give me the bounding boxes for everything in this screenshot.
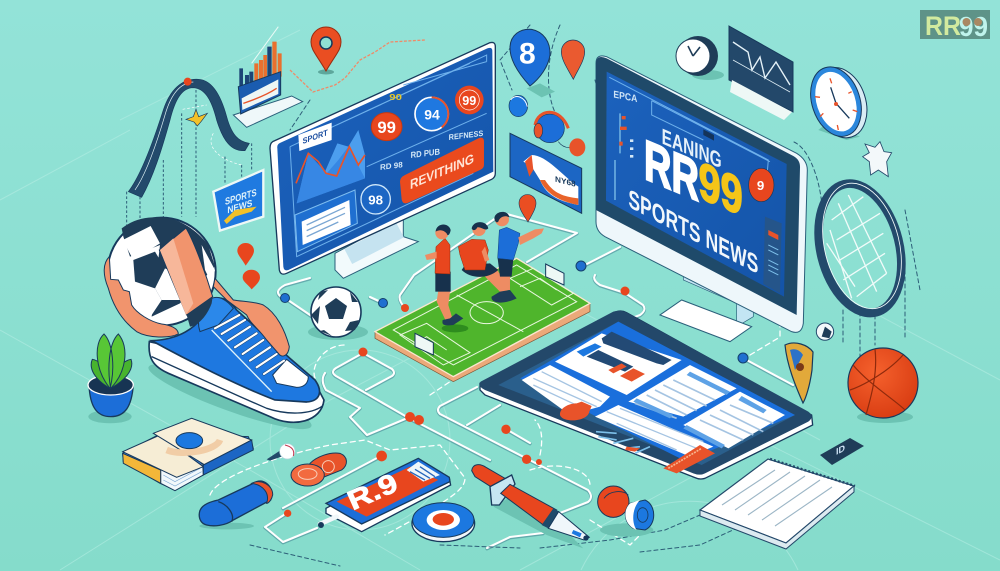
icon: small pins <box>237 243 260 289</box>
line chart dashed <box>290 40 425 92</box>
icon: star outline <box>863 142 892 177</box>
device <box>820 438 864 465</box>
pen and weights <box>472 465 654 548</box>
sign panel: SPORTS <box>225 188 257 208</box>
icon: star <box>186 109 207 126</box>
sport label: SPORT <box>303 127 328 146</box>
icon: soccer ball with leg and hands, sneaker <box>88 217 324 439</box>
sign panel <box>213 170 263 231</box>
sneaker sole <box>149 342 324 422</box>
icon: badge 8: 8 <box>519 37 536 70</box>
notepad <box>700 459 855 549</box>
laptop bar chart <box>233 27 303 127</box>
leg <box>159 228 213 315</box>
icon: headset <box>534 112 585 156</box>
small labels: 90 <box>389 93 403 102</box>
player right <box>494 212 544 290</box>
logo <box>920 10 990 42</box>
small labels <box>380 93 484 172</box>
icon: dots <box>284 425 542 517</box>
logo: 99 <box>959 11 988 42</box>
icon: small soccer ball <box>308 287 368 340</box>
sign panel: NEWS <box>227 198 252 216</box>
hands <box>104 257 178 337</box>
pitch and players <box>375 212 590 382</box>
area chart <box>296 130 365 203</box>
top left ribbon, star, laptop and sign <box>127 20 303 231</box>
network node dots <box>280 261 748 425</box>
score badge 99: 99 <box>377 118 396 137</box>
badge 9: 9 <box>757 178 764 193</box>
chart panel <box>729 26 793 120</box>
logo: RR <box>925 11 961 41</box>
icons between monitors <box>509 29 585 213</box>
score badge 99 small <box>455 86 484 114</box>
score badge 94 <box>415 97 448 131</box>
icon: coins <box>291 453 346 486</box>
book <box>123 418 253 491</box>
text card <box>295 190 357 252</box>
icon: goals <box>415 333 433 355</box>
monitor: right <box>596 56 807 342</box>
icon: capsule marker <box>199 481 273 529</box>
icon: phone R9: R.9 <box>342 467 402 516</box>
headline: 99 <box>699 149 743 227</box>
badge 98 <box>361 185 390 214</box>
monitor: left <box>270 42 495 278</box>
right side icons <box>802 60 914 340</box>
photo card <box>510 133 582 213</box>
icon: phone R9 <box>318 458 451 532</box>
photo card: NY68 <box>555 175 576 189</box>
small labels: RD 98 <box>380 160 403 172</box>
sock <box>187 297 213 327</box>
badge 98: 98 <box>368 193 383 208</box>
icon: tennis racket <box>806 175 914 322</box>
score badge 99 small: 99 <box>462 94 476 108</box>
icon: map pin <box>311 27 341 74</box>
icon: whistle <box>267 444 295 461</box>
device: ID <box>836 443 845 458</box>
headline: RR <box>644 127 699 214</box>
tablet <box>479 311 813 479</box>
score badge 94: 94 <box>424 106 440 122</box>
icon: balloon <box>509 95 528 117</box>
icon: weights <box>598 486 654 537</box>
red button: REVITHING <box>410 150 474 192</box>
player left <box>425 225 468 332</box>
icon: pen <box>472 465 589 541</box>
small labels: REFNESS <box>449 129 484 142</box>
icon: pin <box>561 40 585 79</box>
score badge 99 <box>371 113 402 141</box>
sport label <box>298 123 332 151</box>
badge 9 <box>749 168 774 202</box>
icon: target disc <box>412 503 475 542</box>
sneaker upper <box>152 298 320 402</box>
icon: shield <box>785 343 813 403</box>
shadow <box>527 83 555 97</box>
red button <box>400 138 484 203</box>
connector paths <box>210 25 920 566</box>
icon: basketball <box>848 348 918 423</box>
headline <box>628 123 758 280</box>
player middle <box>458 222 517 303</box>
laces <box>215 315 284 374</box>
icon: badge 8 <box>510 29 550 86</box>
icon: small ball right <box>816 323 834 340</box>
headline: SPORTS NEWS <box>628 183 758 280</box>
icon: wall clock small <box>676 36 724 80</box>
tablet button <box>560 402 592 420</box>
small label EPCA: EPCA <box>613 89 638 105</box>
icon: large clock <box>802 60 876 145</box>
desk items <box>123 418 542 542</box>
headline: EANING <box>662 123 722 173</box>
ribbon <box>128 78 249 197</box>
icon: potted plant <box>88 334 133 423</box>
small labels: RD PUB <box>411 146 440 160</box>
icon: pin near pitch <box>519 194 536 222</box>
